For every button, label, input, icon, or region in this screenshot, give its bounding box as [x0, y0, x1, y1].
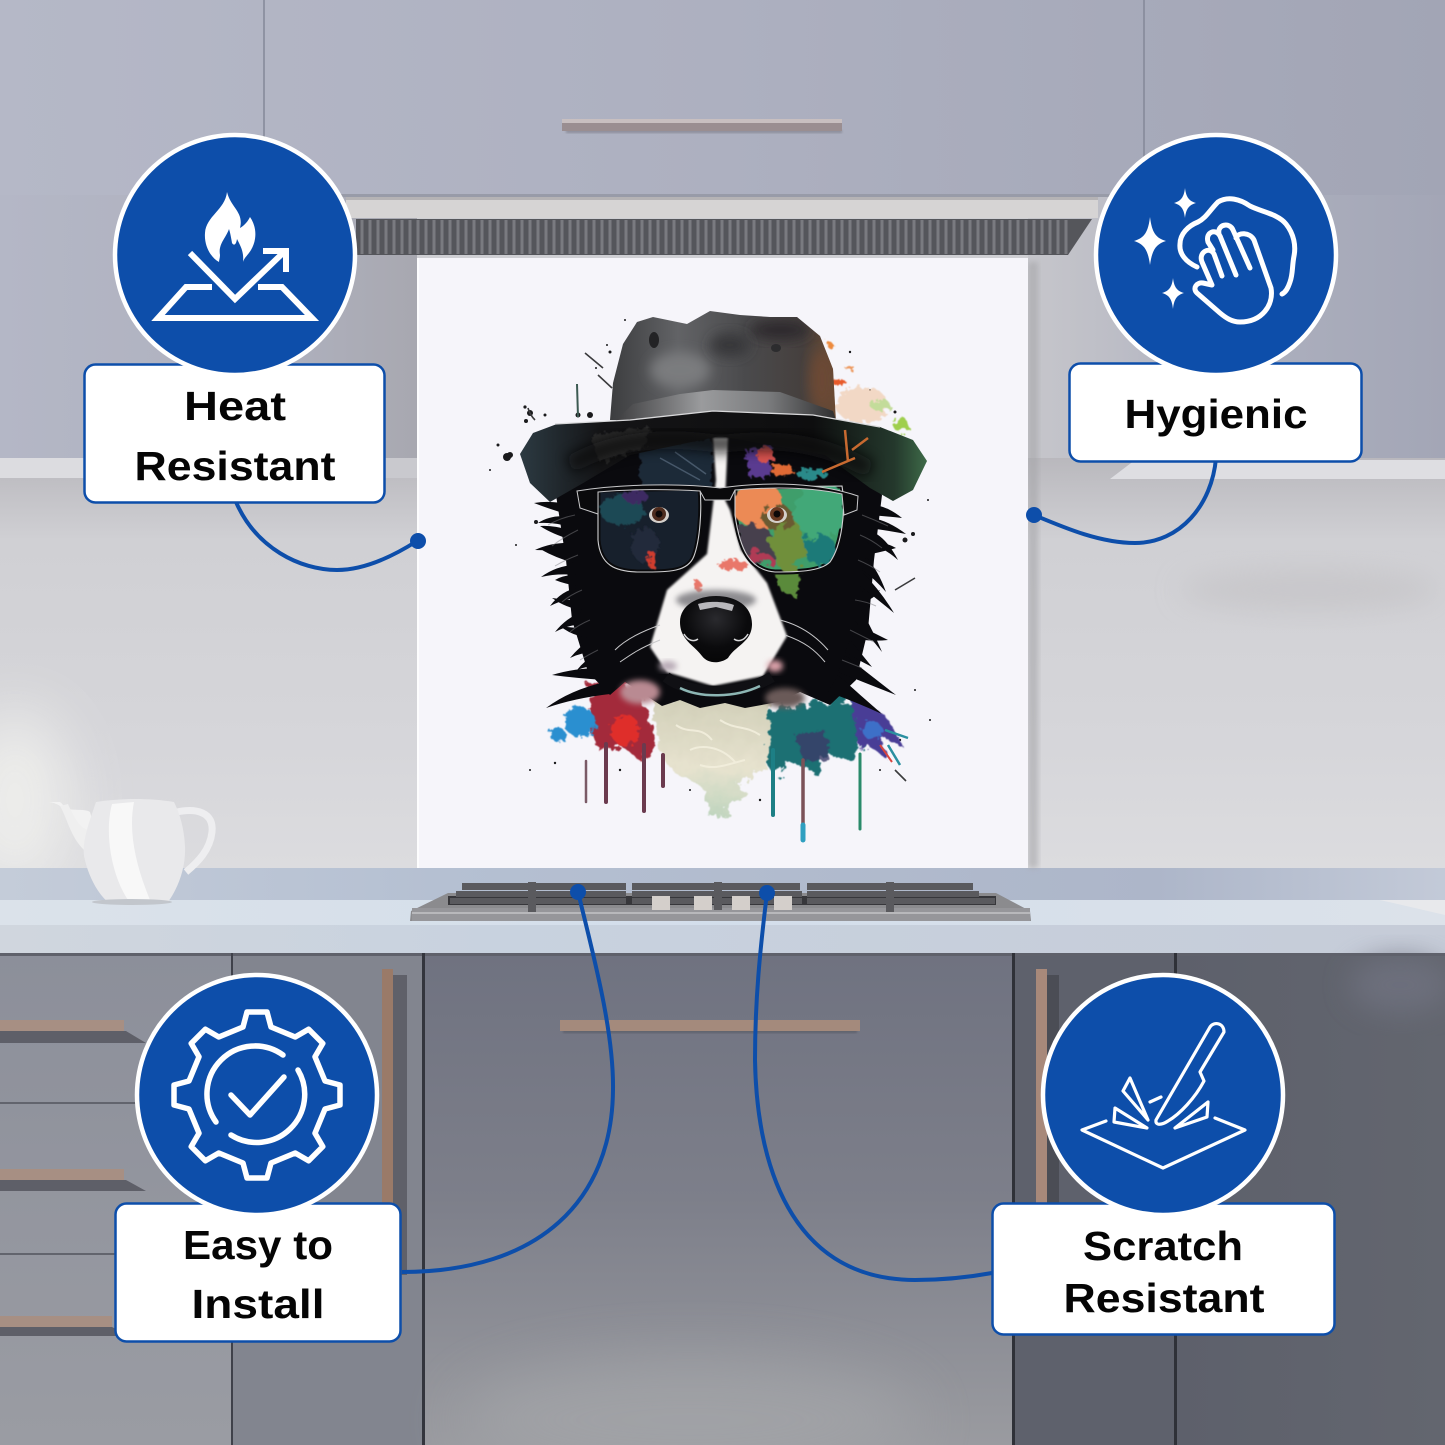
lower cabinets: [0, 953, 1445, 1445]
label text: Easy to: [183, 1222, 333, 1268]
right lens: [735, 486, 844, 572]
dog head black fur: [534, 432, 906, 714]
label box: [116, 1204, 400, 1342]
teapot: [48, 799, 212, 905]
white muzzle and blaze: [650, 438, 787, 686]
dog painting: [489, 311, 931, 840]
control knobs: [652, 896, 792, 910]
glasses frame: [577, 484, 858, 515]
counter: [0, 868, 1445, 953]
pink and grey neck fur: [620, 680, 805, 708]
nose: [676, 590, 756, 662]
label text: Install: [192, 1281, 324, 1327]
printed glass splashback panel: [417, 258, 1038, 868]
left lens: [598, 488, 701, 572]
connector: scratch resistant: [755, 885, 992, 1280]
label text: Heat: [184, 383, 286, 429]
label text: Resistant: [1064, 1275, 1265, 1321]
fur strands: [548, 515, 888, 668]
label text: Scratch: [1083, 1223, 1243, 1269]
badge: heat resistant: [84, 135, 384, 502]
hat brim: [520, 411, 927, 502]
badge: easy to install: [116, 975, 400, 1342]
icon: flame over reflected arrow: [158, 192, 312, 318]
label text: Resistant: [134, 443, 336, 489]
fur tufts left: [534, 502, 610, 708]
dog eyes: [649, 507, 787, 523]
label box: [1070, 364, 1362, 462]
gas cooktop: [410, 882, 1031, 921]
label box: [84, 364, 384, 502]
badge: hygienic: [1070, 135, 1362, 462]
fur tufts right: [828, 505, 906, 714]
tiled splash wall: [0, 458, 1445, 890]
cream chest fur: [652, 690, 770, 820]
label box: [992, 1204, 1334, 1334]
whiskers and mouth: [615, 620, 828, 695]
icon: hand wiping with sparkles: [1134, 188, 1295, 322]
hat: [520, 311, 927, 502]
paint drips: [586, 744, 860, 840]
icon: knife scratching surface: [1082, 1024, 1245, 1168]
burner grates: [450, 882, 995, 912]
purple-blue splash: [850, 695, 905, 760]
pink paint marks: [694, 560, 748, 591]
connector: heat resistant: [236, 502, 426, 570]
blue paint blobs: [564, 707, 596, 737]
icon: gear with check: [174, 1012, 340, 1178]
upper wall cabinets: [0, 0, 1445, 460]
circle: [115, 135, 355, 375]
connector: easy to install: [402, 884, 613, 1272]
connector: hygienic: [1026, 458, 1216, 543]
chest paint colours: [550, 685, 908, 820]
lower cabinet handles: [0, 969, 1059, 1336]
sunglasses: [577, 482, 858, 572]
range hood: [346, 197, 1098, 255]
hat band: [612, 390, 836, 424]
red paint: [590, 685, 655, 760]
paint splatter specks: [489, 319, 931, 801]
circle: [137, 975, 377, 1215]
upper cabinet handle: [562, 119, 842, 133]
forehead fur and paint: [640, 440, 828, 490]
label text: Hygienic: [1124, 391, 1308, 437]
circle: [1043, 975, 1283, 1215]
teal paint: [765, 695, 865, 775]
badge: scratch resistant: [992, 975, 1334, 1334]
splash behind hat right: [827, 342, 909, 432]
hat crown: [610, 311, 836, 422]
circle: [1096, 135, 1336, 375]
green patch below lens: [772, 566, 802, 598]
